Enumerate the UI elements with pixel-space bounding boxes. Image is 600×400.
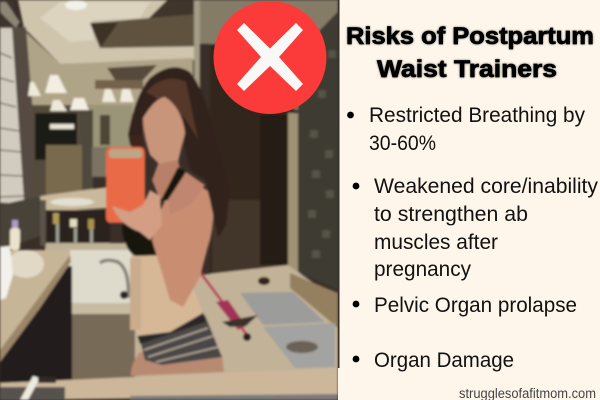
bullet: weakened core <box>353 175 598 281</box>
front counter <box>0 368 338 400</box>
title <box>346 23 594 83</box>
door <box>210 44 294 274</box>
mirror lower area <box>32 105 92 195</box>
bullet: weakened core: Weakened core/inability <box>374 175 598 198</box>
woman: hand <box>112 190 162 240</box>
title: Risks of Postpartum <box>346 23 594 50</box>
left window blinds and frame <box>0 0 14 30</box>
vanity left <box>0 266 72 385</box>
right panel background <box>338 0 600 400</box>
woman: legs <box>131 352 224 376</box>
bullet: restricted breathing <box>347 104 585 155</box>
mirror reflected ceiling <box>26 32 193 115</box>
woman: face and neck <box>143 97 185 167</box>
icon: red circle with white X <box>214 1 326 114</box>
woman: arm and shoulder <box>152 184 213 307</box>
pink stroller toy <box>200 272 247 335</box>
shower tile wall <box>298 14 338 290</box>
bullet: organ damage: Organ Damage <box>374 349 514 372</box>
ceiling <box>18 0 197 64</box>
title: Waist Trainers <box>377 56 557 83</box>
floor <box>135 265 338 380</box>
woman: waist trainer <box>130 250 203 336</box>
lamps <box>65 0 87 10</box>
back wall above door <box>195 0 338 110</box>
woman: striped underwear <box>140 315 222 365</box>
woman: phone <box>106 147 145 223</box>
title: Waist Trainers <box>377 56 557 83</box>
woman: hair <box>128 67 230 238</box>
divider line <box>338 0 340 368</box>
bullet: restricted breathing: 30-60% <box>369 132 436 155</box>
bathtub <box>62 250 137 305</box>
bullet: weakened core: muscles after <box>374 231 498 254</box>
bullet: restricted breathing: Restricted Breathing by <box>369 104 585 127</box>
bullet: weakened core: pregnancy <box>374 258 471 281</box>
photo: woman taking a mirror selfie in a waist trainer <box>0 0 338 400</box>
bullet: pelvic organ prolapse: Pelvic Organ prolapse <box>374 294 577 317</box>
title: Risks of Postpartum <box>346 23 594 50</box>
back counter, cabinet and candles <box>40 187 108 212</box>
bullet: weakened core: to strengthen ab <box>374 203 528 226</box>
woman: bra <box>121 223 158 258</box>
